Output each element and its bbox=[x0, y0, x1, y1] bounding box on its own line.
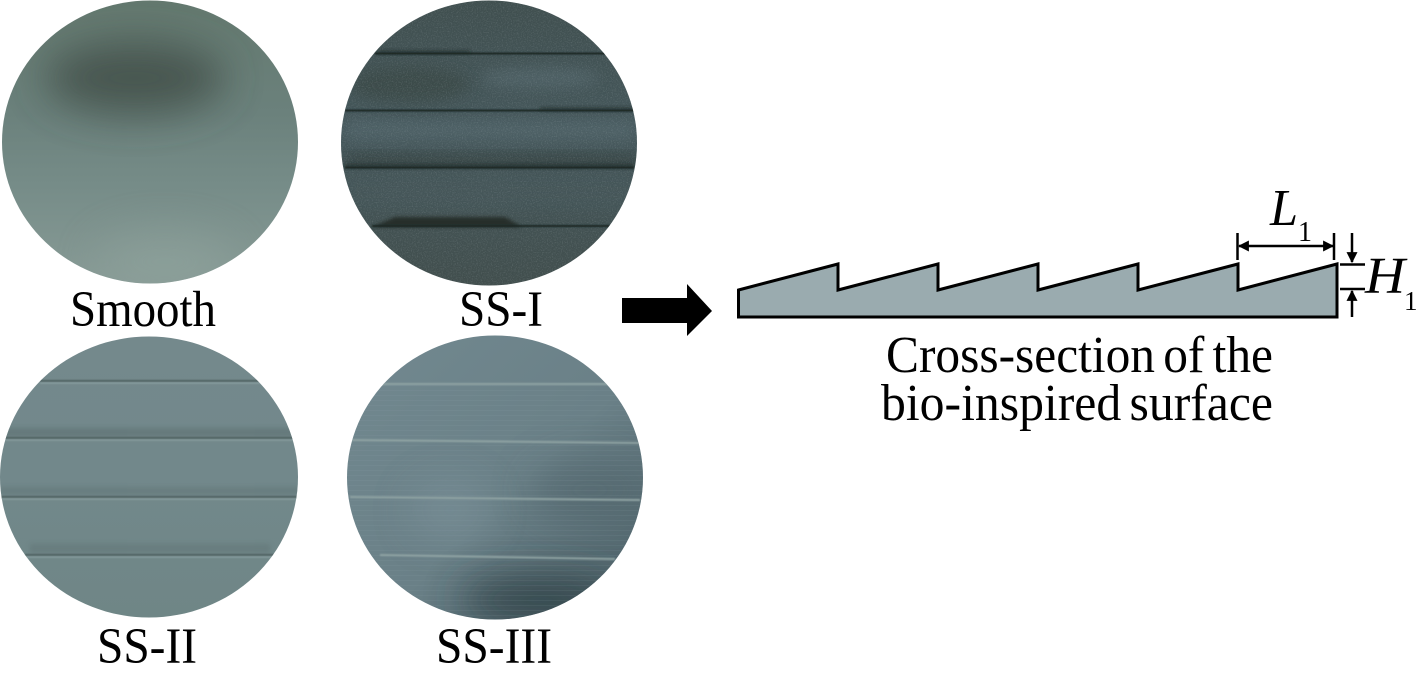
diagram: sawtooth cross-section bbox=[738, 264, 1337, 317]
arrow: photos to cross-section bbox=[622, 284, 712, 336]
caption: cross-section bbox=[881, 325, 1273, 431]
dimension: L1: 1 bbox=[1298, 217, 1312, 248]
label: SS-I: SS-I bbox=[459, 280, 543, 337]
caption: cross-section: Cross-section of the bbox=[886, 325, 1273, 383]
photo: SS-I disc with grooves bbox=[340, 0, 640, 287]
photo: SS-II disc with grooves bbox=[0, 335, 300, 620]
dimension: H1: 1 bbox=[1404, 286, 1418, 316]
photo: Smooth disc bbox=[0, 0, 300, 292]
dimension: L1: L bbox=[1269, 180, 1298, 237]
label: SS-III: SS-III bbox=[436, 617, 552, 674]
dimension: L1 bbox=[1238, 180, 1334, 260]
photo: SS-III disc with grooves bbox=[345, 335, 650, 624]
label: SS-II: SS-II bbox=[97, 617, 197, 674]
dimension: H1 bbox=[1340, 233, 1418, 317]
label: Smooth: Smooth bbox=[70, 280, 216, 337]
caption: cross-section: bio-inspired surface bbox=[881, 373, 1273, 431]
dimension: H1: H bbox=[1364, 248, 1408, 305]
